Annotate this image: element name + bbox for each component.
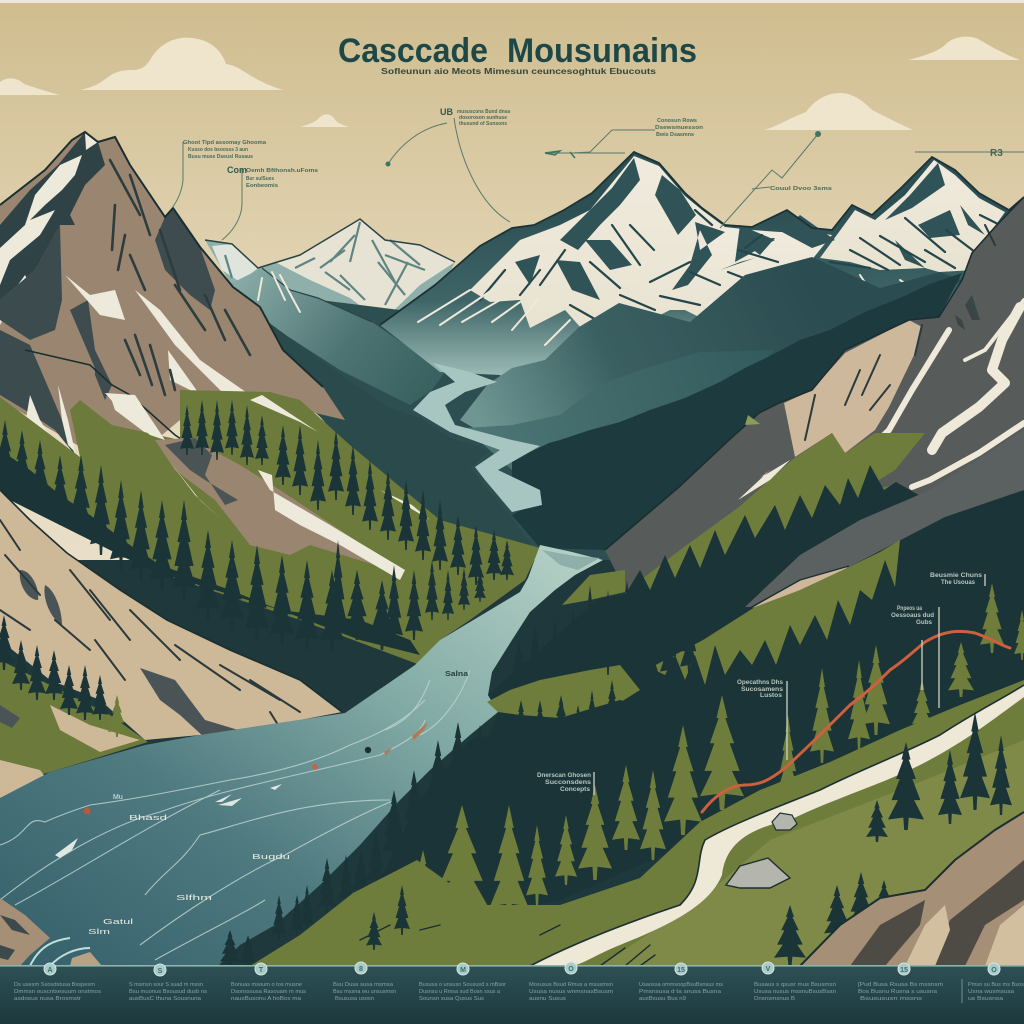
sky callouts: Conosun Rows (657, 118, 697, 124)
legend text: Ususa nusus mssnuBsusBsan (754, 989, 836, 995)
second grey ridge (745, 430, 1024, 607)
dark forest mass right (440, 430, 1024, 900)
legend text: Ususa nusus wnmsnasBsusm (529, 989, 613, 995)
lower left beige slope (0, 490, 342, 740)
foreground callouts: Succonsdens (545, 780, 592, 786)
legend text: Bsususa usosn (335, 996, 374, 1002)
legend icons (44, 962, 1000, 976)
legend text: Dusnsu u Rmsa sud Bosn ssus a (419, 989, 501, 995)
sky callouts: Ghoot Tipd assomay Ghooma (183, 140, 267, 146)
sky callouts: Couul Dvoo 3sms (770, 186, 832, 192)
snow streaks (845, 300, 1024, 487)
sky callouts: Dsewsmuesson (655, 125, 704, 131)
main snow range (380, 152, 1024, 420)
foreground pine trees (366, 583, 1024, 965)
legend text: nausBusonu A hoBos ma (231, 996, 302, 1002)
lake labels: Bugdu (252, 854, 290, 861)
legend text: [Pud Busa Rsusa Bs mssnsm (858, 982, 943, 988)
legend text: us Bsusnsa (968, 996, 1004, 1002)
foreground callouts: The Usouas (941, 580, 976, 586)
teal valley slope, left (232, 268, 445, 405)
legend text: Usaossa ommsoopBsuBsnsus ms (639, 982, 723, 988)
beige streak (752, 566, 849, 608)
legend text: ausBsusu Bus n9 (639, 996, 686, 1002)
far mountain range (205, 219, 455, 340)
legend text: Bususa o unsusn Soususd s mBsor (419, 982, 506, 988)
sky callouts (172, 107, 1024, 240)
trail (530, 685, 1024, 966)
sky callouts: mususcons Bund dnsa (457, 109, 511, 115)
legend text: Bsusususn mssns (860, 996, 922, 1002)
legend text: ausBusC thuna Sousnuna (129, 996, 202, 1002)
foreground callouts: Pnpeos ua (897, 606, 923, 612)
legend text: Busaus s qsusr mus Bsusmsn (754, 982, 836, 988)
elevation profile line (702, 631, 1010, 812)
foreground callouts: Gubs (916, 620, 933, 626)
lake and river (0, 545, 603, 966)
teal under-layer filling the valley (240, 290, 620, 560)
title (338, 32, 697, 70)
legend text: Dsonsssusa Rasouam m mus (231, 989, 306, 995)
beige cliff (784, 320, 922, 457)
sky callouts: Kusso dos bsoosss 3 aun (188, 147, 248, 153)
legend text: Mosusus Bsud Rmus a msusmsn (529, 982, 613, 988)
sky callouts: Bwis Dsasmns (656, 132, 694, 138)
foreground callouts: Lustos (760, 693, 783, 699)
legend text: S msmsn sour S suad m mssn (129, 982, 203, 988)
sky callouts: Eonbeomis (246, 183, 278, 189)
bottom legend band: T (259, 967, 264, 974)
bottom legend band (0, 962, 1024, 1024)
right grey mountain (605, 197, 1024, 650)
bottom legend band: M (460, 967, 466, 974)
lake labels: Slfhm (176, 895, 212, 902)
left mountain (0, 132, 345, 470)
legend text: Pmsnsusa d ta snusa Busna (639, 989, 722, 995)
boulders (772, 813, 797, 830)
mid slope layer B (465, 350, 775, 470)
foreground callouts: Sucosamens (741, 687, 784, 693)
bottom legend band: 8 (359, 966, 363, 973)
legend text: Dnsnsmsnus B (754, 996, 795, 1002)
rock outcrop (155, 438, 400, 570)
sky callouts: Busu muse Dseusl Rusaus (188, 154, 253, 160)
foreground callouts: Beusmie Chuns (930, 573, 983, 579)
upper river (413, 363, 542, 512)
green meadow (625, 433, 925, 650)
sky callouts: R3 (990, 148, 1003, 159)
foreground callouts: Concepts (560, 787, 591, 793)
dense forest mass (0, 450, 420, 655)
lakeshore dark pine trees (220, 695, 760, 966)
lower-left shore rock (0, 898, 102, 966)
sky background (0, 0, 1024, 560)
foreground callouts (537, 573, 985, 795)
dark slope left of river (268, 322, 535, 550)
bottom legend band: A (47, 967, 53, 974)
legend text: asdosus nusa Brosmstr (14, 996, 81, 1002)
title: Casccade (338, 32, 488, 70)
lake labels (88, 794, 290, 936)
bottom legend band: V (766, 966, 771, 973)
clouds (0, 37, 1020, 130)
lake labels: Gatul (103, 919, 134, 926)
sky callouts: UB (440, 107, 453, 117)
sky callouts: Bur sulSues (246, 176, 274, 182)
subtitle: Sofleunun aio Meots Mimesun ceuncesoghtuk Ebucouts (381, 67, 657, 76)
sky callouts: Oemh Bfthonsh.uFoms (246, 168, 318, 174)
legend text: Bsu Dusa susa msmsa (333, 982, 394, 988)
bottom legend band: S (158, 968, 163, 975)
foreground callouts: Dnerscan Ghosen (537, 773, 591, 779)
legend text: Dmmsn ouscntsesuum onstmos (14, 989, 101, 995)
legend text: Pmsn su Bus ms Bsos (968, 982, 1024, 988)
sky callouts: Com (227, 165, 247, 175)
lake and river: Salna (445, 671, 468, 678)
legend text: Bsu mssna wu unsusmsn (333, 989, 396, 995)
bottom-right rock outcrop (800, 812, 1024, 966)
bottom legend band: 15 (900, 967, 908, 974)
sky callouts: thusund of Sunsons (459, 121, 507, 127)
foreground green hillside (250, 680, 1024, 966)
rock face (0, 132, 345, 470)
legend text: Ds usesm Ssosdstusa Bsspesm (14, 982, 95, 988)
lake labels: Slm (88, 929, 110, 936)
legend text: ausnu Susus (529, 996, 566, 1002)
bottom-left green bank (0, 615, 148, 798)
left green forested slope (0, 390, 540, 665)
bottom legend band: 15 (677, 967, 685, 974)
small river islet (487, 550, 698, 740)
legend text: Sounsn susa Qusus Sus (419, 996, 484, 1002)
foreground callouts: Opecathns Dhs (737, 680, 784, 686)
olive tree line band (650, 540, 900, 685)
sky callouts: dosoroson sunhuse (459, 115, 507, 121)
dark forested ridge, right (512, 273, 962, 550)
bottom legend band: O (991, 967, 997, 974)
mid valley slope, dark teal (460, 257, 962, 450)
bottom legend band: O (568, 966, 574, 973)
title: Mousunains (507, 32, 697, 70)
legend text (14, 982, 1024, 1002)
foreground callouts: Oessoaus dud (891, 613, 934, 619)
legend text: Bsu muonus Bsousud dusb ns (129, 989, 207, 995)
lake labels: Mu (113, 794, 123, 801)
legend text: Bonuas msoum o tos musne (231, 982, 302, 988)
legend text: Bos Busnu Rusna s ususna (858, 989, 938, 995)
lake labels: Bhasd (129, 815, 167, 822)
legend text: Usna wusmsusa (968, 989, 1015, 995)
boat markers (84, 808, 90, 814)
